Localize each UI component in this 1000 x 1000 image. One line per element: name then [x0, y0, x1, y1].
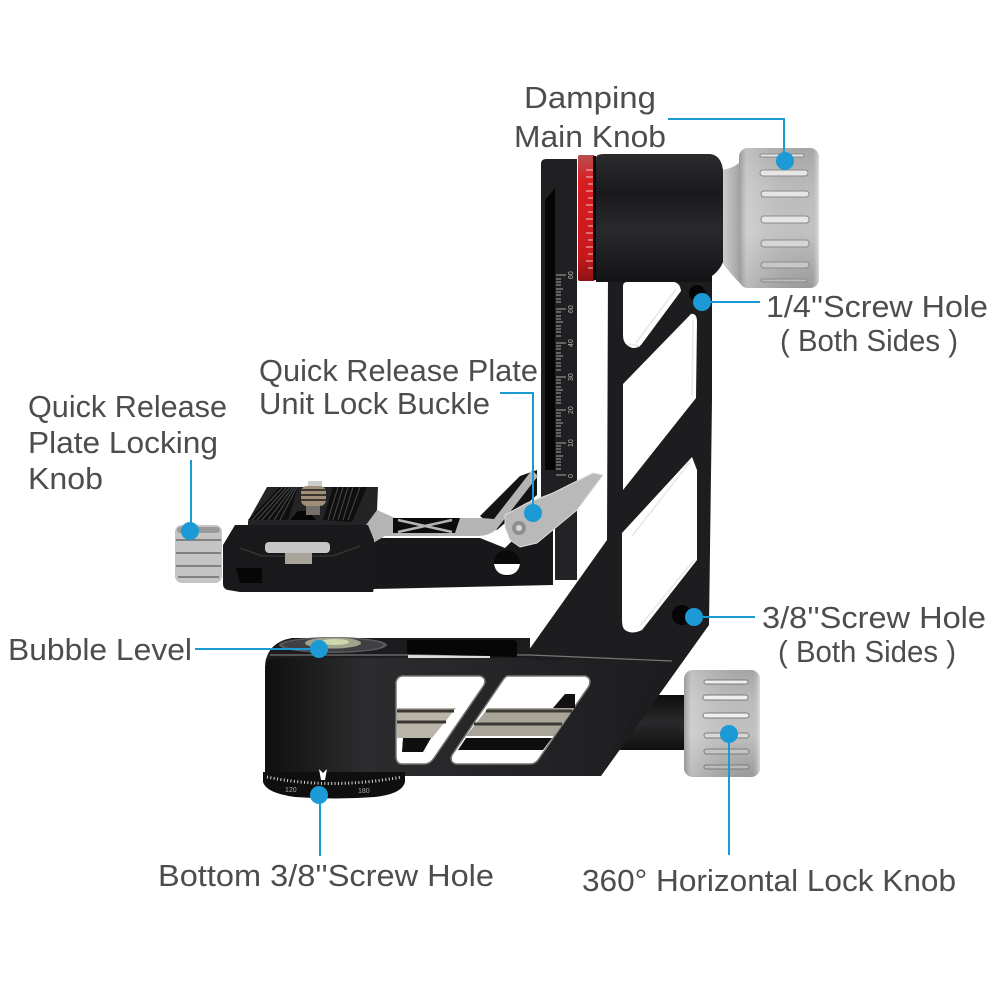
callout: bubble level [8, 632, 328, 667]
callout: damping main knob: Main Knob [514, 119, 666, 154]
callout: 3/8 screw hole: ( Both Sides ) [778, 634, 956, 669]
callout: bottom 3/8 screw hole: Bottom 3/8''Screw Hole [158, 858, 494, 893]
callout: 1/4 screw hole: ( Both Sides ) [780, 323, 958, 358]
quick release arm [366, 470, 577, 589]
callout: 3/8 screw hole: 3/8''Screw Hole [762, 600, 986, 635]
vertical scale rail: 30 [568, 373, 575, 381]
horizontal lock knob [684, 670, 760, 777]
vertical scale rail: 0 [568, 474, 575, 478]
red damping ring [578, 155, 596, 281]
side screw holes [672, 285, 705, 625]
callout: quick release plate unit lock buckle: Unit Lock Buckle [259, 386, 490, 421]
vertical scale rail: 10 [568, 439, 575, 447]
vertical scale rail: 60 [568, 305, 575, 313]
base cylinder and arm [265, 638, 672, 778]
callout: 360 horizontal lock knob: 360° Horizontal Lock Knob [582, 863, 956, 898]
callout: quick release plate unit lock buckle: Quick Release Plate [259, 353, 538, 388]
callout: quick release plate unit lock buckle [259, 353, 542, 522]
gimbal bracket product [175, 148, 819, 798]
quick release plate [248, 487, 378, 525]
main vertical bracket with windows [400, 270, 712, 776]
quick release locking knob [175, 525, 222, 583]
quick release lever [505, 473, 603, 547]
vertical scale rail [541, 159, 577, 580]
rotation dial [263, 769, 405, 798]
callout: 1/4 screw hole: 1/4''Screw Hole [766, 289, 988, 324]
callout: bottom 3/8 screw hole [158, 786, 494, 893]
vertical scale rail: 60 [568, 271, 575, 279]
base windows [396, 676, 590, 764]
rotation dial: 120 [285, 787, 297, 794]
callout: quick release plate locking knob: Quick Release [28, 389, 227, 424]
rotation dial: 180 [358, 788, 370, 795]
callout: bubble level: Bubble Level [8, 632, 192, 667]
callout: 360 horizontal lock knob [582, 725, 956, 898]
damping main knob [739, 148, 819, 288]
callout: quick release plate locking knob [28, 389, 227, 540]
callout: 3/8 screw hole [685, 600, 986, 669]
damping cylinder [596, 154, 723, 282]
callout: damping main knob [514, 80, 794, 170]
callout: quick release plate locking knob: Knob [28, 461, 103, 496]
callout: 1/4 screw hole [693, 289, 988, 358]
callout: quick release plate locking knob: Plate Locking [28, 425, 218, 460]
camera screw [301, 481, 326, 515]
damping neck [722, 160, 742, 285]
quick release clamp [223, 525, 374, 592]
top bubble level disc [279, 637, 387, 653]
vertical scale rail: 20 [568, 406, 575, 414]
callout: damping main knob: Damping [524, 80, 656, 115]
window highlights [628, 289, 694, 626]
horizontal lock shaft [610, 695, 690, 750]
vertical scale rail: 40 [568, 339, 575, 347]
